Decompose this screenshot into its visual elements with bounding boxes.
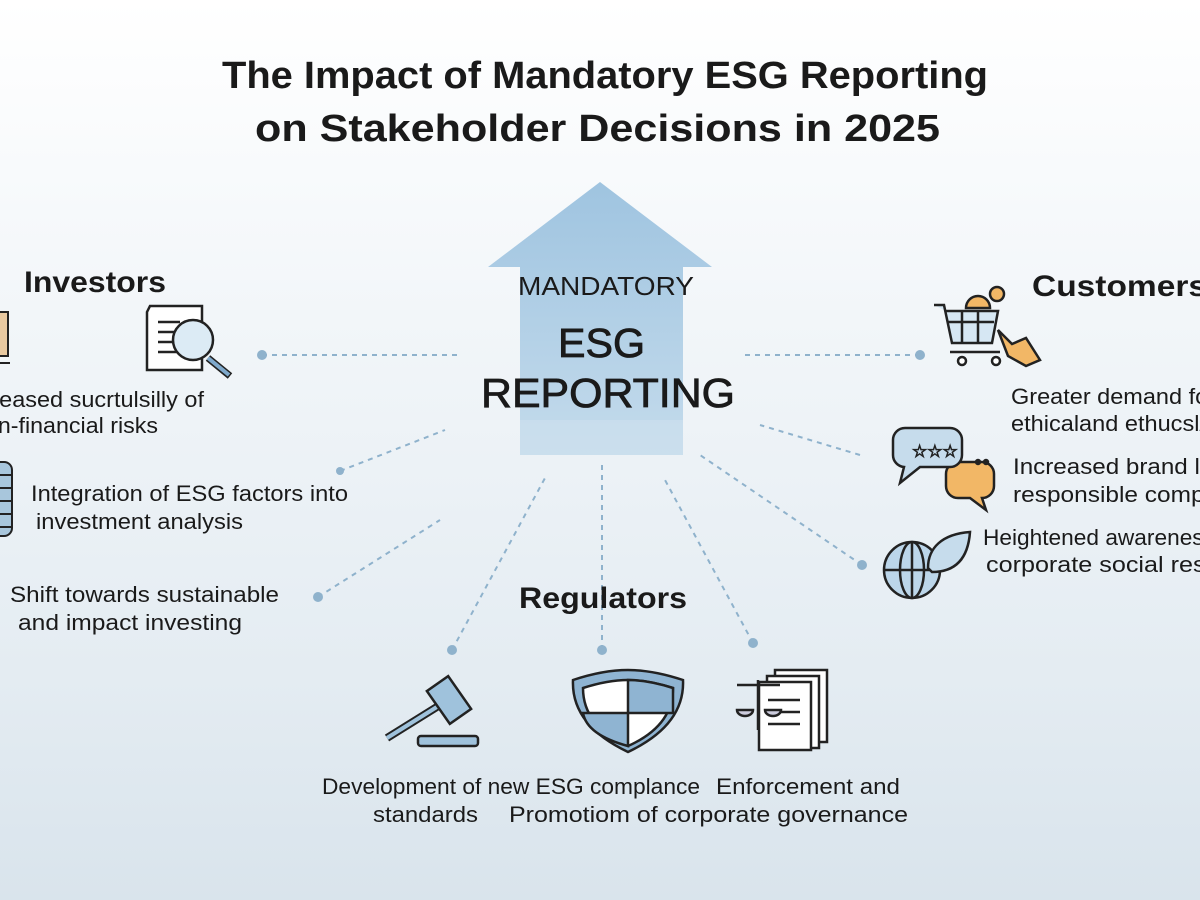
text: investors points: Shift towards sustainable bbox=[10, 582, 279, 607]
text: investors points bbox=[0, 387, 348, 635]
central arrow: mandatory ESG reporting: MANDATORY bbox=[518, 271, 694, 301]
heading: regulators: Regulators bbox=[519, 582, 687, 615]
icon: shield bbox=[573, 670, 683, 752]
text: regulators points bbox=[322, 774, 908, 827]
icon: gavel bbox=[387, 676, 478, 746]
connector lines bbox=[257, 350, 925, 655]
title bbox=[222, 55, 988, 150]
icon: speech bubbles with stars bbox=[893, 428, 994, 510]
text: customers points: ethicaland ethucsl/ bbox=[1011, 411, 1200, 436]
heading: investors: Investors bbox=[24, 266, 166, 299]
icon: coin stack bbox=[0, 462, 12, 536]
text: regulators points: standards bbox=[373, 802, 478, 827]
text: investors points: and impact investing bbox=[18, 610, 242, 635]
text: customers points: Greater demand for bbox=[1011, 384, 1200, 409]
text: customers points bbox=[983, 384, 1200, 577]
title: The Impact of Mandatory ESG Reporting bbox=[222, 55, 988, 97]
icon: speech bubbles with stars: ☆☆☆ bbox=[912, 442, 958, 461]
text: regulators points: Enforcement and bbox=[716, 774, 900, 799]
panel: customers bbox=[884, 270, 1200, 598]
central arrow: mandatory ESG reporting bbox=[481, 182, 735, 455]
panel: regulators bbox=[322, 582, 908, 827]
panel: investors bbox=[0, 266, 348, 635]
central arrow: mandatory ESG reporting: ESG bbox=[558, 320, 645, 366]
text: investors points: Integration of ESG factors into bbox=[31, 481, 348, 506]
icon: scales and document bbox=[737, 670, 827, 750]
text: regulators points: Development of new ESG complance bbox=[322, 774, 700, 799]
icon: laptop partial bbox=[0, 312, 10, 363]
title: on Stakeholder Decisions in 2025 bbox=[255, 108, 940, 150]
text: regulators points: Promotiom of corporate governance bbox=[509, 802, 908, 827]
central arrow: mandatory ESG reporting: REPORTING bbox=[481, 370, 735, 416]
icon: globe with leaf bbox=[884, 532, 970, 598]
heading: customers: Customers bbox=[1032, 270, 1200, 303]
text: investors points: investment analysis bbox=[36, 509, 243, 534]
icon: document magnifier bbox=[147, 306, 230, 376]
icon: shopping cart bbox=[934, 287, 1040, 366]
